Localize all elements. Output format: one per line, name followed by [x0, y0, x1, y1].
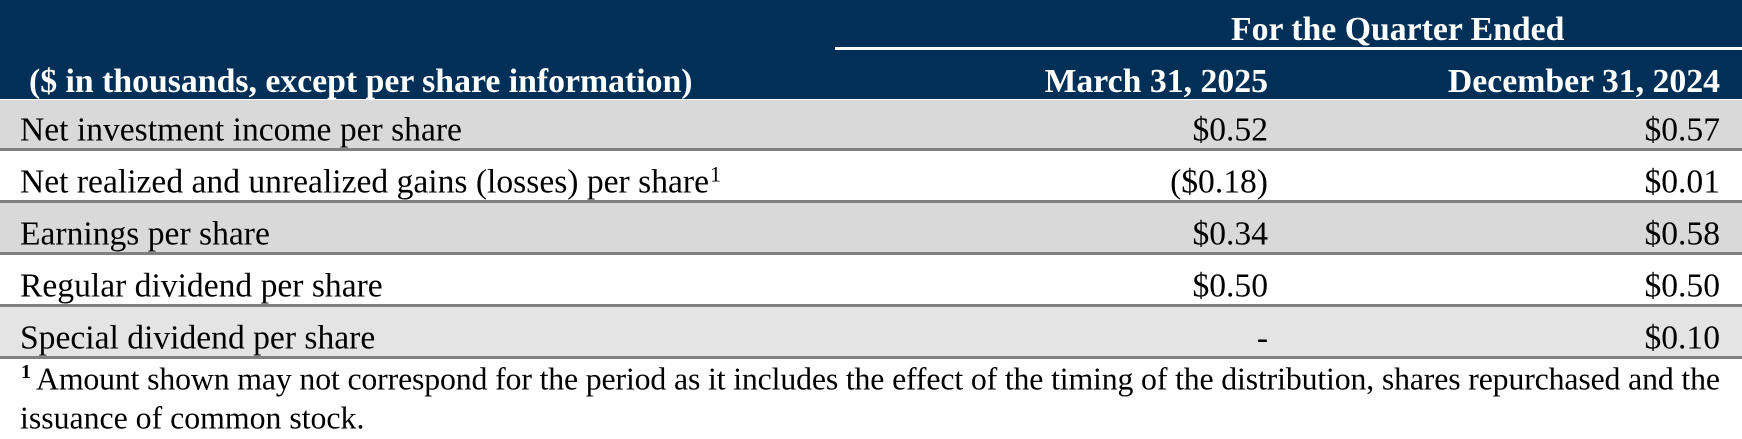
row: regular dividend: $0.50 [1192, 268, 1268, 304]
table header band [0, 0, 1742, 100]
heading: units note: ($ in thousands, except per share information) [29, 63, 692, 100]
footnote: 1 [21, 361, 31, 383]
row: net investment income: $0.52 [1192, 112, 1268, 148]
row: net realized and unrealized gains: 1 [710, 162, 721, 186]
row: net investment income: Net investment income per share [20, 112, 462, 148]
row: regular dividend: Regular dividend per share [20, 268, 383, 304]
footnote: issuance of common stock. [20, 400, 364, 436]
row: special dividend [0, 307, 1742, 359]
row: earnings per share: Earnings per share [20, 216, 270, 252]
row: earnings per share [0, 203, 1742, 255]
row: net investment income: $0.57 [1644, 112, 1720, 148]
row: net realized and unrealized gains: Net realized and unrealized gains (losses) per share [20, 164, 709, 200]
column heading: March 31, 2025: March 31, 2025 [1045, 63, 1268, 100]
row: net realized and unrealized gains [0, 162, 1742, 203]
footnote: Amount shown may not correspond for the period as it includes the effect of the timing of the distribution, shares repurchased and the [36, 362, 1720, 396]
row: earnings per share: $0.34 [1192, 216, 1268, 252]
row: special dividend: - [1257, 320, 1268, 356]
row: net realized and unrealized gains: ($0.18) [1170, 164, 1268, 200]
footnote [20, 361, 1720, 436]
column heading: December 31, 2024: December 31, 2024 [1448, 63, 1720, 100]
row: net investment income [0, 100, 1742, 151]
row: net realized and unrealized gains: $0.01 [1644, 164, 1720, 200]
heading: for the quarter ended: For the Quarter Ended [1231, 11, 1565, 48]
row: regular dividend [0, 268, 1742, 307]
row: regular dividend: $0.50 [1644, 268, 1720, 304]
row: special dividend: Special dividend per share [20, 320, 375, 356]
row: special dividend: $0.10 [1644, 320, 1720, 356]
row: earnings per share: $0.58 [1644, 216, 1720, 252]
